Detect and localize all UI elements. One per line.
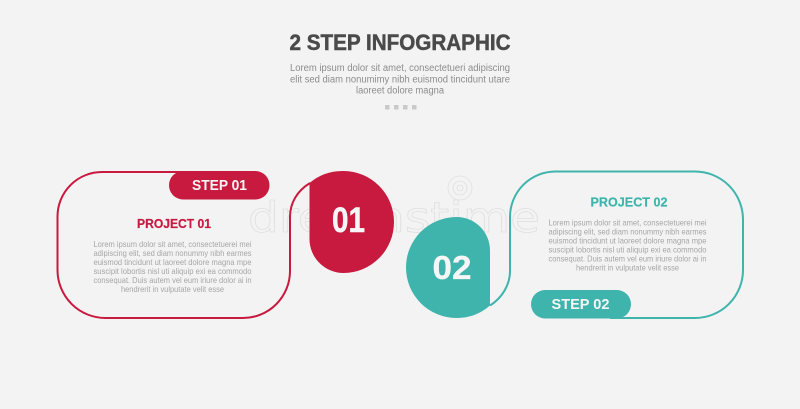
body text: project 01: suscipit lobortis nisl uti aliquip exi ea commodo (94, 266, 252, 276)
body text: project 01 (94, 239, 252, 294)
subtitle text block: laoreet dolore magna (356, 86, 444, 96)
panel: step 02 (406, 172, 743, 318)
subtitle text block: elit sed diam nonumimy nibh euismod tincidunt utare (290, 74, 510, 86)
number circle: 01: 01 (332, 201, 365, 240)
body text: project 02: euismod tincidunt ut laoreet dolore magna mpe (548, 236, 707, 246)
number circle: 02 (406, 217, 490, 318)
subtitle text block: Lorem ipsum dolor sit amet, consectetueri adipiscing (290, 63, 510, 74)
body text: project 01: euismod tincidunt ut laoreet dolore magna mpe (94, 257, 252, 267)
body text: project 02: consequat. Duis autem vel eum iriure dolor ai in (548, 254, 707, 264)
body text: project 01: adipiscing elit, sed diam nonummy nibh earmes (94, 248, 252, 258)
subtitle text block (290, 63, 510, 96)
badge: step 02: STEP 02 (552, 297, 610, 313)
outline: step 01 box (58, 172, 310, 318)
watermark (248, 176, 540, 242)
heading: project 01: PROJECT 01 (137, 217, 211, 231)
heading: project 02: PROJECT 02 (590, 196, 668, 210)
body text: project 02: Lorem ipsum dolor sit amet, consectetuerei mei (548, 218, 707, 228)
body text: project 02: adipiscing elit, sed diam nonummy nibh earmes (548, 226, 706, 236)
badge: step 01: STEP 01 (192, 178, 247, 194)
body text: project 01: Lorem ipsum dolor sit amet, consectetuerei mei (94, 239, 252, 249)
badge: step 01 (169, 171, 270, 200)
panel: step 01 (58, 171, 394, 318)
watermark: dreamstime (248, 193, 540, 242)
pagination dots (385, 105, 416, 110)
body text: project 01: hendrerit in vulputate velit esse (121, 284, 224, 294)
number circle: 01 (310, 171, 394, 273)
body text: project 02 (548, 218, 707, 272)
body text: project 02: suscipit lobortis nisl uti aliquip exi ea commodo (548, 244, 707, 254)
badge: step 02 (531, 290, 631, 318)
title: 2 STEP INFOGRAPHIC (290, 30, 511, 55)
body text: project 01: consequat. Duis autem vel eum iriure dolor ai in (94, 275, 252, 285)
outline: step 02 box (490, 172, 743, 318)
number circle: 02: 02 (432, 249, 472, 286)
body text: project 02: hendrerit in vulputate velit esse (576, 262, 679, 272)
